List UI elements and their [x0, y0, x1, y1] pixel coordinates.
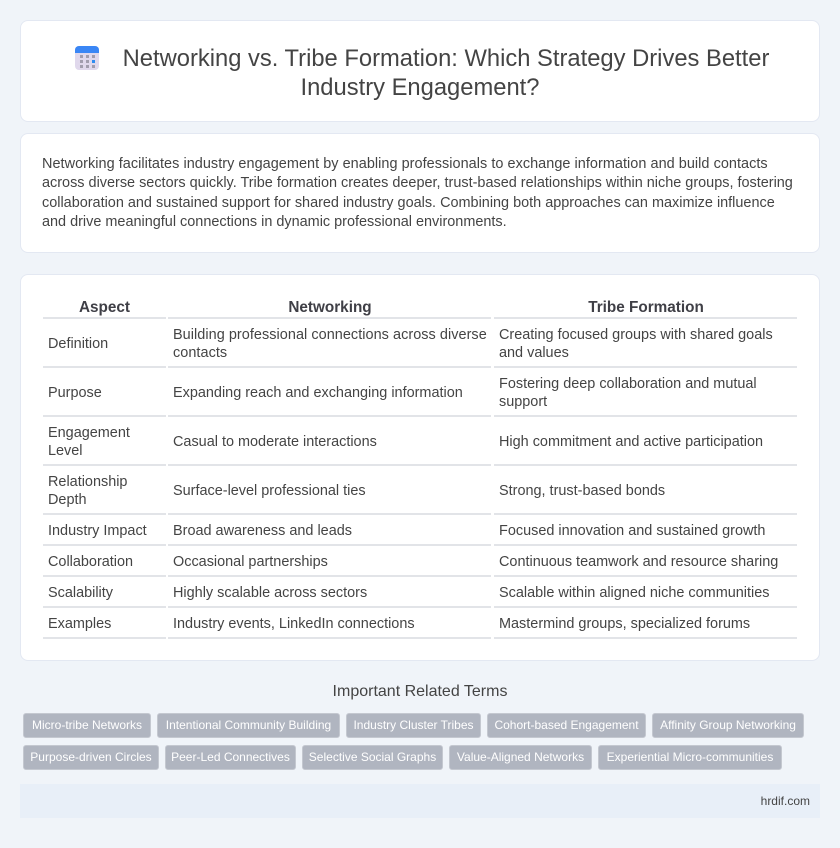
- title: [123, 45, 769, 101]
- text: Surface-level professional ties: [173, 483, 366, 499]
- intro text: [42, 156, 793, 230]
- row: Scalability: [48, 585, 769, 601]
- text: and drive meaningful connections in dynamic professional environments.: [42, 214, 507, 230]
- text: Collaboration: [48, 554, 133, 570]
- row: Relationship Depth: [48, 474, 665, 508]
- text: Examples: [48, 616, 111, 632]
- text: Strong, trust-based bonds: [499, 483, 665, 499]
- text: Mastermind groups, specialized forums: [499, 616, 750, 632]
- tags: related terms: Selective Social Graphs: [309, 750, 436, 764]
- text: and values: [499, 345, 569, 361]
- text: Networking facilitates industry engagement by enabling professionals to exchange information and build contacts: [42, 156, 768, 172]
- text: Fostering deep collaboration and mutual: [499, 376, 757, 392]
- tags: related terms: Affinity Group Networking: [660, 718, 796, 732]
- tags: related terms: [23, 713, 804, 770]
- row: Industry Impact: [48, 523, 765, 539]
- text: contacts: [173, 345, 227, 361]
- text: Continuous teamwork and resource sharing: [499, 554, 778, 570]
- text: Tribe Formation: [588, 299, 704, 316]
- text: support: [499, 394, 547, 410]
- icon: calendar: [75, 46, 99, 70]
- text: Relationship: [48, 474, 127, 490]
- heading: related terms: Important Related Terms: [333, 683, 507, 700]
- tags: related terms: Micro-tribe Networks: [32, 718, 142, 732]
- tags: related terms: Intentional Community Building: [166, 718, 331, 732]
- text: collaboration and sustained support for shared industry goals. Combining both approaches can maximize influence: [42, 195, 775, 211]
- tags: related terms: Industry Cluster Tribes: [353, 718, 474, 732]
- text: Creating focused groups with shared goals: [499, 327, 773, 343]
- tags: related terms: Peer-Led Connectives: [171, 750, 290, 764]
- panel: introduction: [20, 133, 820, 253]
- text: Networking: [288, 299, 372, 316]
- text: across diverse sectors quickly. Tribe formation creates deeper, trust-based relationships within niche groups, fostering: [42, 175, 793, 191]
- tags: related terms: Experiential Micro-communities: [607, 750, 773, 764]
- text: High commitment and active participation: [499, 434, 763, 450]
- text: Aspect: [79, 299, 130, 316]
- text: Expanding reach and exchanging information: [173, 385, 463, 401]
- tags: related terms: Cohort-based Engagement: [494, 718, 639, 732]
- text: Scalable within aligned niche communities: [499, 585, 769, 601]
- row: Examples: [48, 616, 750, 632]
- text: Purpose: [48, 385, 102, 401]
- text: Broad awareness and leads: [173, 523, 352, 539]
- row: Purpose: [48, 376, 757, 410]
- text: Focused innovation and sustained growth: [499, 523, 765, 539]
- text: Definition: [48, 336, 108, 352]
- text: Scalability: [48, 585, 113, 601]
- text: Depth: [48, 492, 87, 508]
- footer: hrdif.com: [761, 794, 810, 808]
- panel: comparison table: [20, 274, 820, 661]
- table header: [79, 299, 704, 316]
- tags: related terms: Value-Aligned Networks: [457, 750, 584, 764]
- text: Level: [48, 443, 83, 459]
- text: Occasional partnerships: [173, 554, 328, 570]
- row: Definition: [48, 327, 773, 361]
- text: Engagement: [48, 425, 130, 441]
- panel: title card: [20, 20, 820, 122]
- text: Networking vs. Tribe Formation: Which Strategy Drives Better: [123, 45, 769, 72]
- text: Industry Engagement?: [300, 74, 539, 101]
- footer: [20, 784, 820, 818]
- row: Collaboration: [48, 554, 778, 570]
- tags: related terms: Purpose-driven Circles: [30, 750, 152, 764]
- text: Industry events, LinkedIn connections: [173, 616, 415, 632]
- text: Casual to moderate interactions: [173, 434, 377, 450]
- text: Building professional connections across diverse: [173, 327, 487, 343]
- text: Highly scalable across sectors: [173, 585, 367, 601]
- row: Engagement Level: [48, 425, 763, 459]
- text: Industry Impact: [48, 523, 147, 539]
